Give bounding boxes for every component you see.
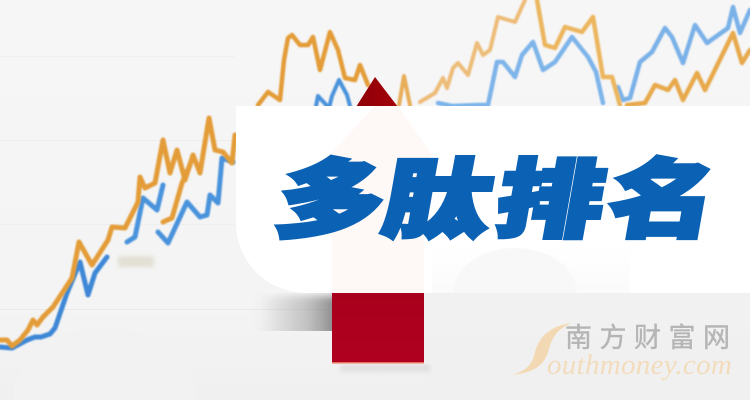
soft floor shadow bbox=[340, 364, 430, 372]
title text: 名 bbox=[602, 152, 725, 248]
title text: 肽 bbox=[377, 152, 500, 248]
watermark latin name: outhmoney.com bbox=[547, 349, 732, 381]
smudge on wall bbox=[118, 256, 154, 267]
logo swoosh bbox=[512, 323, 571, 375]
red house arrow bbox=[332, 77, 424, 364]
watermark: southmoney bbox=[512, 323, 738, 381]
house shadow bbox=[266, 293, 332, 331]
title panel bbox=[236, 106, 750, 293]
title text bbox=[270, 152, 725, 248]
title text: 多 bbox=[270, 152, 393, 248]
watermark Chinese name: 南方财富网 bbox=[565, 323, 738, 353]
title text: 排 bbox=[490, 152, 613, 248]
